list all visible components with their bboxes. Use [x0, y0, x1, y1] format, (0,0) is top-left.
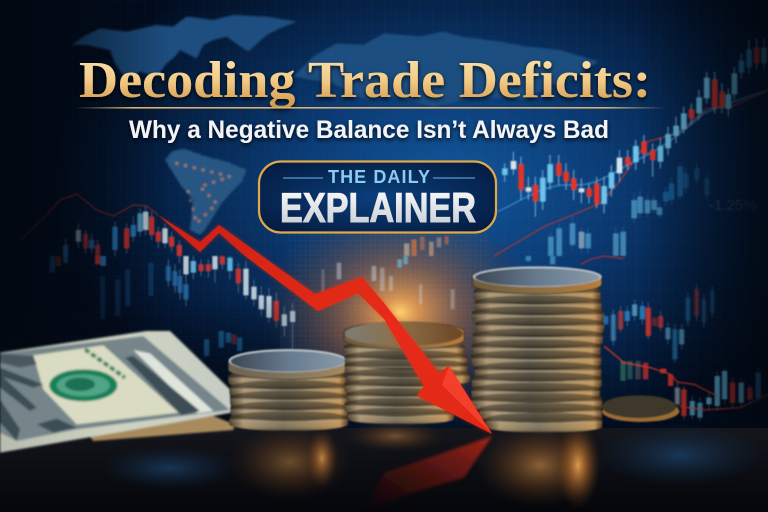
warm glow [260, 190, 540, 430]
left candles upper [63, 207, 182, 263]
dim mid candles [548, 163, 710, 256]
flat coin [602, 395, 679, 422]
title rule [75, 107, 665, 109]
floor reflections [228, 420, 605, 512]
red arrow [158, 215, 492, 434]
map: eurasia landmass [293, 32, 598, 107]
reflection: small stack bright spot [306, 428, 338, 488]
rising candle bodies [502, 48, 767, 204]
percent label: -1.25% [709, 197, 757, 214]
left price line [20, 194, 158, 240]
badge small text: THE DAILY [328, 167, 430, 187]
coin stack: left [228, 349, 349, 431]
left candlestick chart [20, 194, 385, 356]
coin stack: middle [344, 321, 470, 424]
floor blue reflections [100, 423, 765, 490]
lower right price line [604, 346, 768, 410]
bill stack edge [87, 416, 235, 441]
badge main text: EXPLAINER [280, 184, 476, 231]
bill face [0, 331, 232, 453]
tall stack rim [473, 267, 602, 294]
bill serial [85, 349, 125, 378]
reflection: red arrow [364, 436, 492, 512]
reflection: small stack [228, 424, 352, 500]
map: south america dotted [165, 148, 247, 235]
bill light oval stripe [133, 350, 213, 413]
bill engraved frame [0, 336, 230, 441]
map: north america landmass [72, 15, 297, 80]
reflection: tall stack [475, 423, 605, 507]
main rising candlestick chart [404, 38, 768, 256]
map: city lights [177, 163, 230, 223]
bill [0, 331, 235, 453]
middle stack top face [345, 321, 463, 346]
world map [72, 15, 598, 235]
lower right candlestick chart [389, 256, 768, 421]
badge rules [283, 177, 475, 179]
bill dark engraving [0, 353, 200, 441]
table surface [0, 423, 768, 512]
reflection: middle stack [345, 420, 445, 452]
upper right red squiggle [581, 256, 624, 264]
badge frame [259, 162, 496, 232]
middle stack rim [344, 322, 464, 349]
left stack top face [229, 349, 347, 372]
bill seal [49, 369, 117, 401]
title: Decoding Trade Deficits: [79, 52, 651, 109]
coin stack: tall [471, 266, 604, 433]
left stack rim [228, 353, 348, 379]
warm candles by badge [404, 236, 449, 256]
bill cream panel [33, 345, 178, 424]
red moving average [494, 91, 768, 256]
arrow head highlight [442, 366, 492, 434]
subtitle: Why a Negative Balance Isn’t Always Bad [129, 116, 609, 144]
reflection: bright streak [556, 421, 600, 509]
upper wicks [505, 38, 764, 217]
badge [259, 162, 496, 232]
lower right candles [389, 256, 761, 418]
moving averages [497, 90, 768, 212]
left candles lower [50, 256, 385, 356]
tall stack top face [473, 266, 602, 287]
